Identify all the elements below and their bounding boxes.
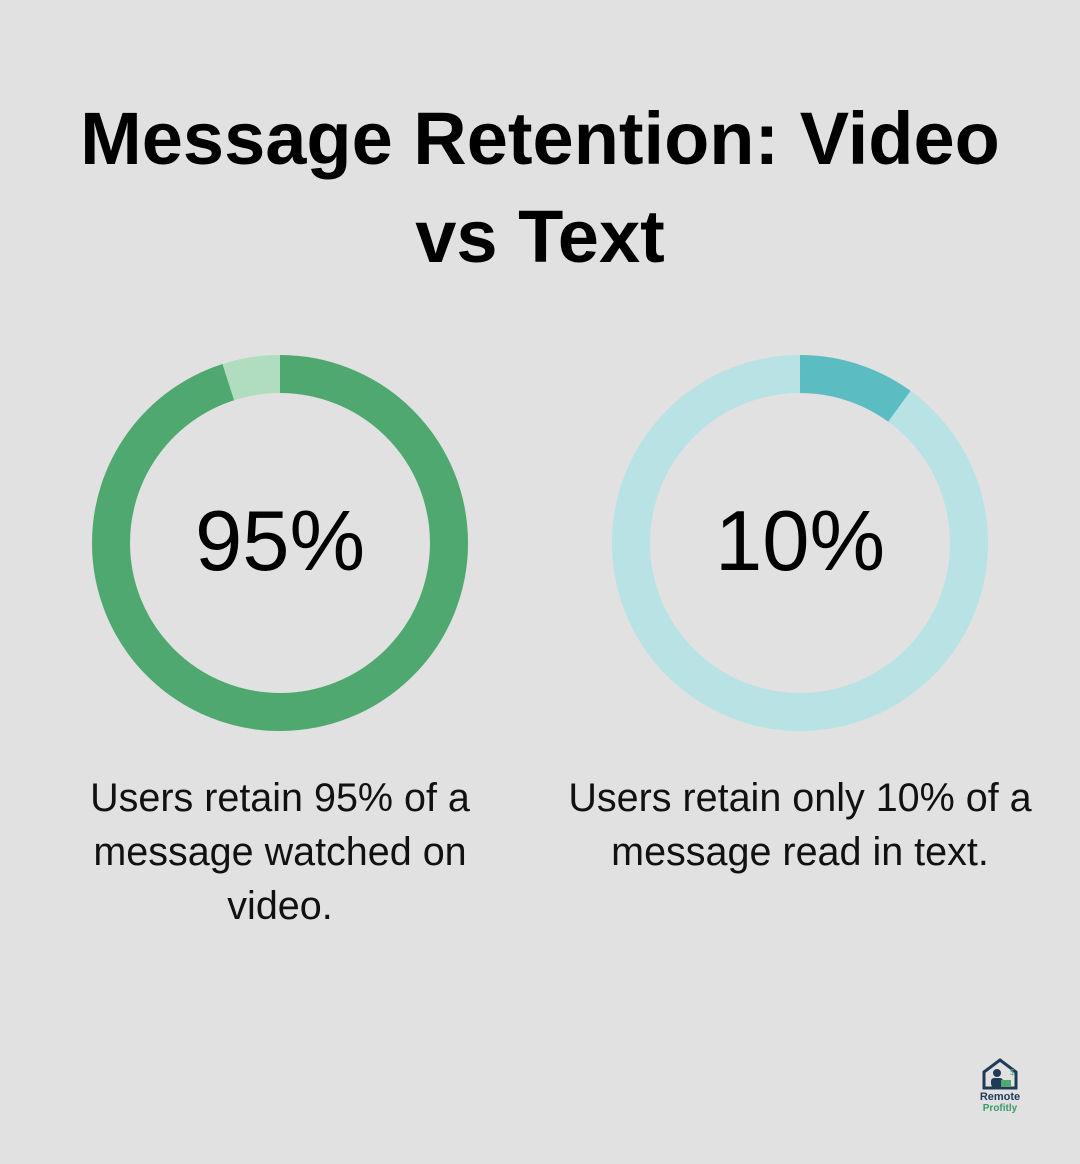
logo: Profitly <box>983 1103 1018 1114</box>
title: vs Text <box>415 195 665 278</box>
donut: video 95% <box>111 374 449 712</box>
donut: text 10% <box>631 374 969 712</box>
caption: video: Users retain 95% of a message watched on video. <box>90 776 470 928</box>
logo <box>980 1060 1020 1114</box>
logo: $ <box>1010 1068 1015 1077</box>
title <box>80 97 1000 278</box>
donut: text 10%: 10% <box>715 494 885 589</box>
caption: text: Users retain only 10% of a message read in text. <box>568 776 1032 874</box>
donut: video 95%: 95% <box>195 494 365 589</box>
title: Message Retention: Video <box>80 97 1000 180</box>
logo: Remote <box>980 1091 1020 1103</box>
